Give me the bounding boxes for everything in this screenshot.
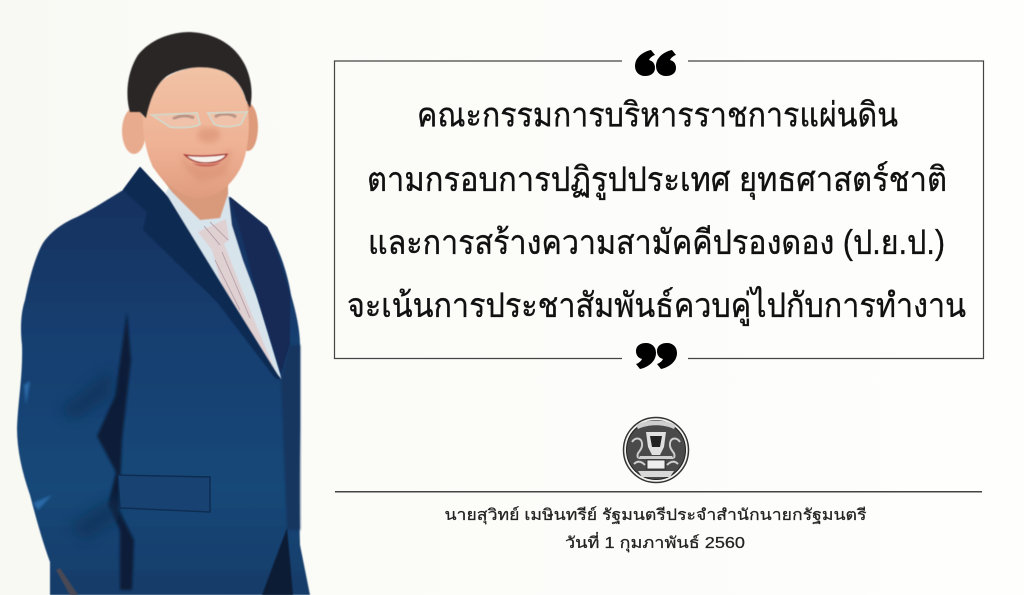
neck bbox=[152, 165, 228, 220]
closing quote mark bbox=[636, 343, 677, 369]
quote text: จะเน้นการประชาสัมพันธ์ควบคู่ไปกับการทำงาน bbox=[347, 286, 966, 326]
sleeve cuff bbox=[56, 568, 78, 595]
attribution text: วันที่ 1 กุมภาพันธ์ 2560 bbox=[565, 532, 745, 553]
opening quote mark bbox=[635, 50, 676, 76]
divider line bbox=[335, 491, 982, 492]
portrait: man in navy suit bbox=[17, 32, 310, 595]
jacket pocket flap bbox=[118, 475, 210, 512]
quote text: ตามกรอบการปฏิรูปประเทศ ยุทธศาสตร์ชาติ bbox=[367, 161, 947, 200]
quote text: คณะกรรมการบริหารราชการแผ่นดิน bbox=[417, 96, 898, 134]
shirt collar and front bbox=[165, 182, 282, 380]
quote text: และการสร้างความสามัคคีปรองดอง (ป.ย.ป.) bbox=[368, 224, 945, 262]
hair bbox=[127, 32, 252, 118]
attribution text: นายสุวิทย์ เมษินทรีย์ รัฐมนตรีประจำสำนักนายกรัฐมนตรี bbox=[444, 506, 866, 525]
face bbox=[143, 66, 249, 198]
quote text bbox=[347, 96, 966, 326]
suit jacket bbox=[17, 167, 310, 595]
sleeve shadows and highlights bbox=[24, 312, 134, 590]
eyes and brows bbox=[173, 114, 236, 119]
attribution text bbox=[444, 506, 866, 553]
tie stripes bbox=[204, 222, 250, 318]
ears bbox=[122, 108, 146, 154]
mouth bbox=[185, 154, 227, 163]
necktie bbox=[198, 219, 278, 378]
suit lapels bbox=[123, 167, 281, 380]
government seal bbox=[624, 418, 688, 482]
glasses bbox=[152, 112, 247, 128]
suit button line bbox=[281, 345, 300, 530]
cheek and nose shading bbox=[197, 128, 221, 143]
quote frame bbox=[334, 50, 984, 369]
trousers bbox=[262, 528, 293, 595]
